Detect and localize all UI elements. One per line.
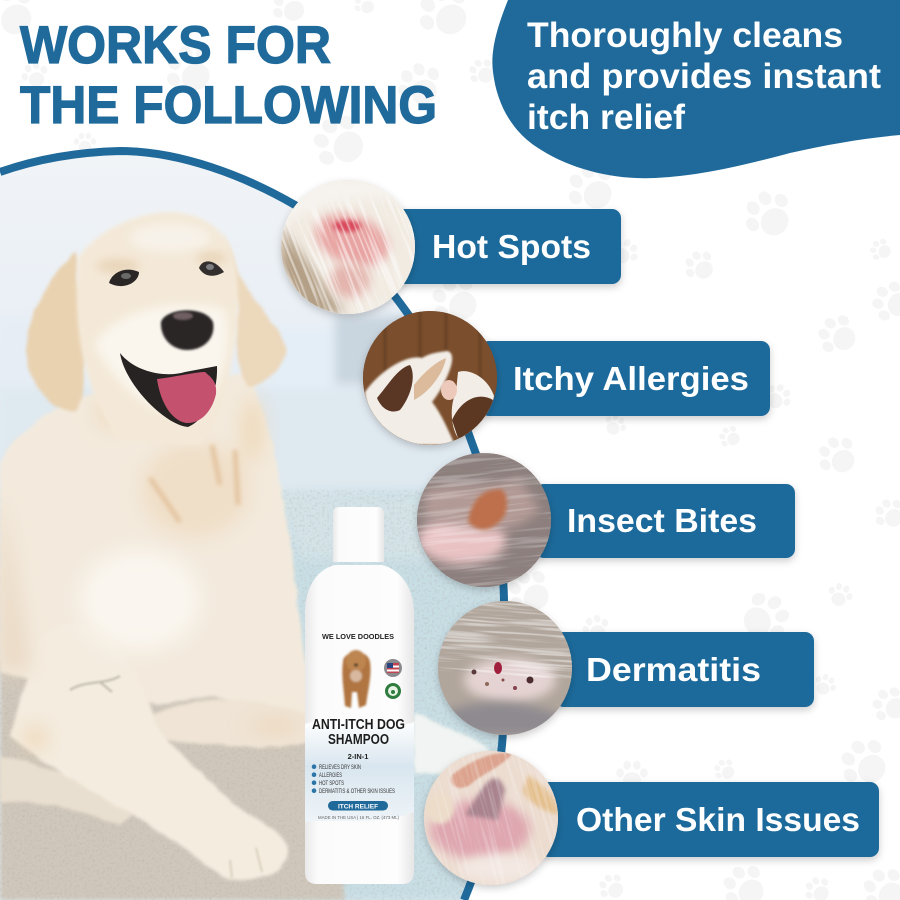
header blob — [492, 0, 900, 178]
chest curls — [150, 445, 238, 522]
size line: MADE IN THE USA | 16 FL. OZ. (473 ML) — [318, 815, 399, 821]
product name: ANTI-ITCH DOG — [312, 717, 405, 733]
other skin issues bar — [540, 782, 879, 857]
product name: SHAMPOO — [328, 732, 389, 748]
product name — [312, 717, 405, 748]
dog photo panel — [0, 150, 528, 900]
dog body group — [0, 232, 492, 880]
carpet texture — [0, 490, 520, 900]
toes — [230, 848, 262, 878]
USA badge — [384, 659, 402, 677]
blob text — [527, 16, 881, 137]
itch relief pill — [328, 801, 388, 810]
green badge — [385, 683, 401, 699]
insect bites bar: Insect Bites — [567, 502, 757, 539]
other skin photo — [420, 750, 560, 892]
product bottle — [305, 507, 414, 884]
checklist: RELIEVES DRY SKIN — [319, 764, 361, 771]
item: hot spots — [278, 180, 624, 320]
other skin issues bar: Other Skin Issues — [576, 801, 860, 838]
dermatitis bar — [555, 632, 814, 707]
hot spots bar — [395, 209, 621, 284]
nose — [161, 310, 213, 350]
hot spots bar: Hot Spots — [432, 228, 591, 265]
item: dermatitis — [418, 584, 814, 735]
item: itchy allergies — [363, 311, 770, 445]
dermatitis photo — [434, 600, 574, 742]
itch relief pill: ITCH RELIEF — [338, 803, 378, 810]
photo arc outline — [0, 151, 506, 900]
hind leg behind bottle — [414, 712, 492, 780]
puppy photo — [363, 311, 497, 445]
brand: WE LOVE DOODLES — [322, 632, 394, 641]
itchy allergies bar: Itchy Allergies — [513, 360, 749, 397]
eyes — [109, 270, 139, 286]
body fur shading — [0, 394, 301, 750]
title — [20, 16, 437, 135]
blob text: itch relief — [527, 98, 685, 137]
ear right — [223, 232, 286, 387]
mouth — [120, 353, 217, 427]
title: WORKS FOR — [20, 16, 331, 75]
insect bites bar — [535, 484, 795, 558]
head — [77, 212, 238, 445]
bottle body — [305, 565, 414, 884]
ear left — [26, 250, 84, 411]
insect bites photo — [414, 452, 554, 594]
blurred room background — [282, 313, 500, 900]
checklist: HOT SPOTS — [319, 780, 344, 787]
checklist — [312, 764, 395, 795]
carpet beige — [0, 660, 345, 900]
leg fur marks — [70, 676, 120, 692]
item: insect bites — [414, 452, 798, 594]
label wave — [305, 720, 414, 822]
2-in-1: 2-IN-1 — [348, 752, 368, 761]
item: other skin issues — [420, 750, 882, 892]
body — [0, 372, 312, 716]
front leg — [9, 678, 290, 882]
head fur shading — [95, 224, 228, 414]
blob text: Thoroughly cleans — [527, 16, 843, 55]
bottle cap — [333, 507, 384, 562]
tail fur — [0, 757, 135, 826]
itchy allergies bar — [480, 341, 770, 416]
checklist: ALLERGIES — [319, 772, 342, 779]
dermatitis bar: Dermatitis — [586, 651, 761, 688]
tongue — [157, 372, 216, 423]
blob text: and provides instant — [527, 57, 881, 96]
hot spots photo — [278, 180, 418, 320]
title: THE FOLLOWING — [20, 76, 437, 135]
dog figure — [0, 212, 492, 880]
doodle dog icon — [342, 650, 371, 708]
checklist: DERMATITIS & OTHER SKIN ISSUES — [319, 788, 395, 795]
back leg fur — [150, 699, 312, 747]
